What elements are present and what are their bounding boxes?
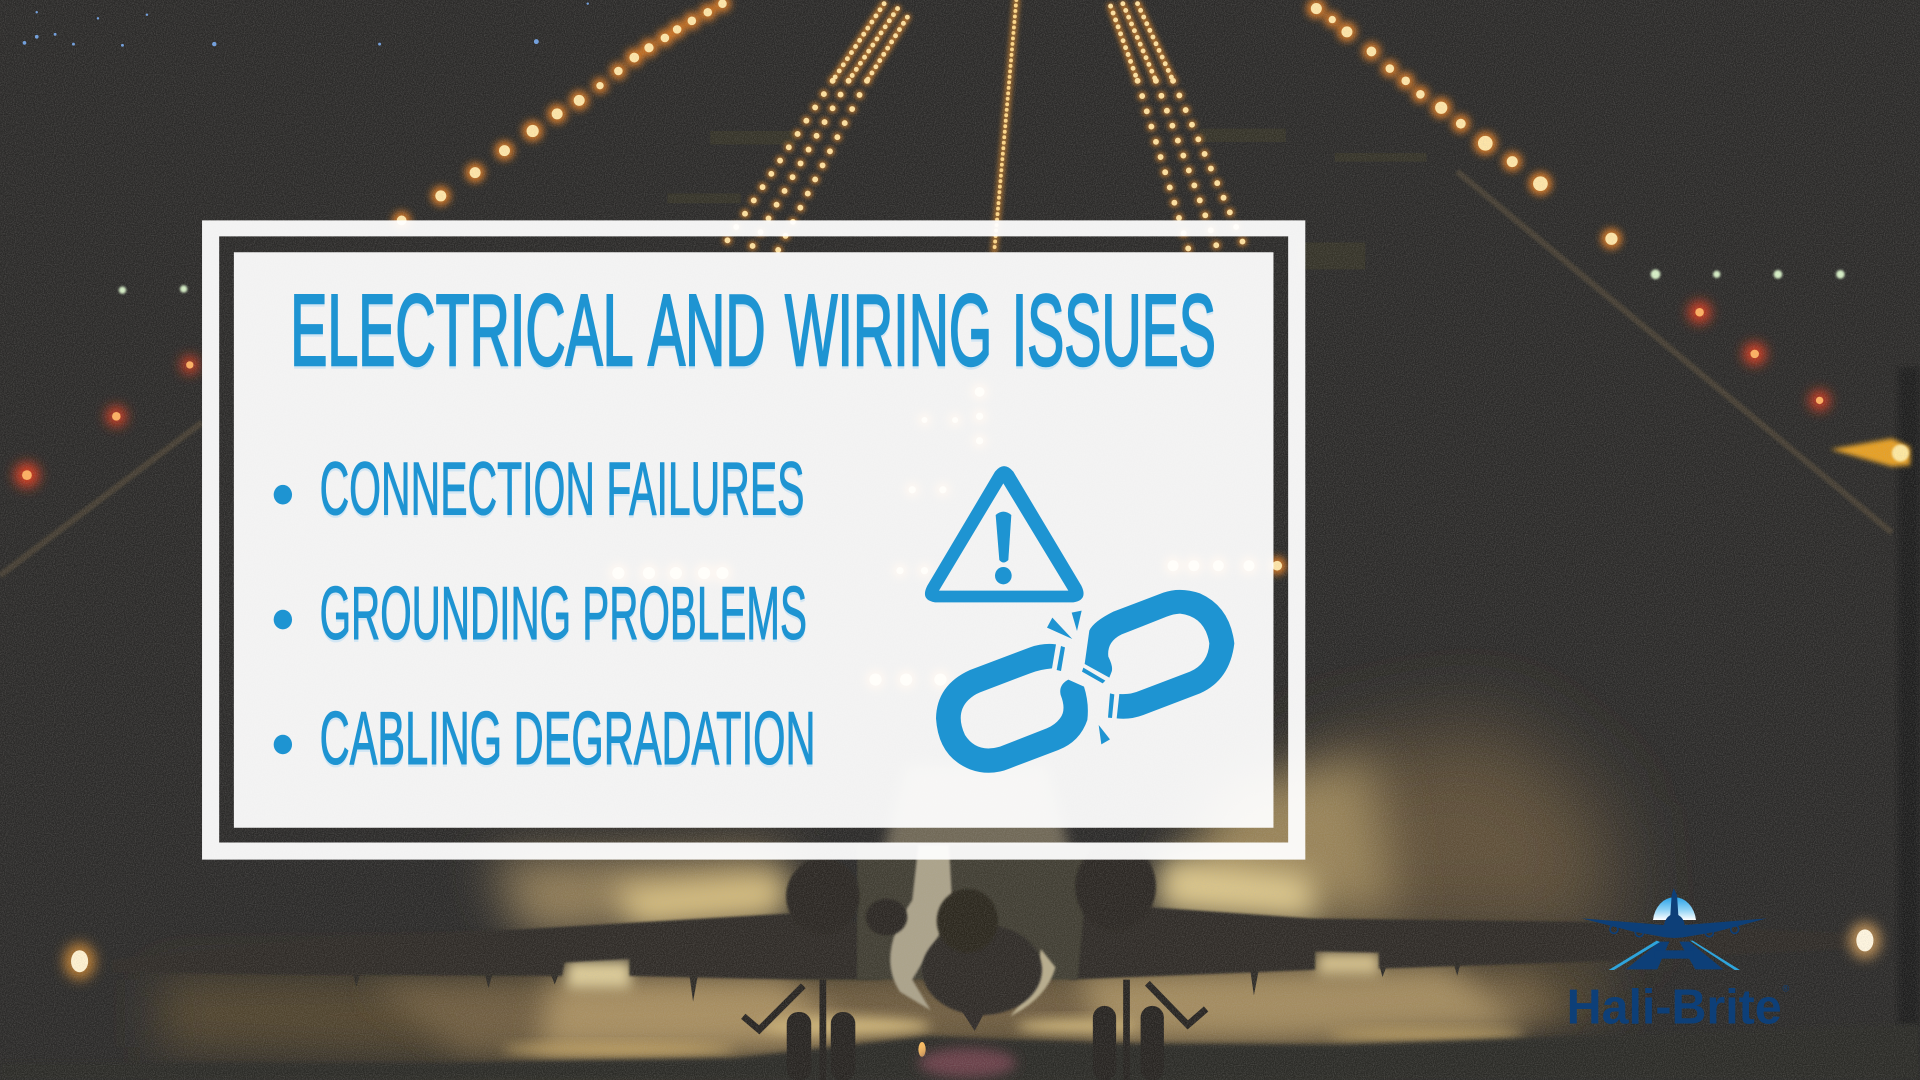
landing gear	[743, 980, 1206, 1080]
right wing	[1053, 907, 1849, 980]
faint runway markings	[667, 129, 1427, 269]
right engine	[1075, 842, 1156, 931]
bullet list	[274, 446, 816, 780]
registered mark: ®	[1782, 984, 1789, 994]
bullet item 3	[274, 696, 816, 780]
outer white frame band	[202, 220, 1305, 860]
logo wordmark: Hali-Brite	[1567, 979, 1782, 1034]
logo sun dome	[1653, 897, 1696, 920]
ground shadow	[0, 1024, 1920, 1080]
aircraft silhouette	[111, 765, 1849, 1080]
left engine	[786, 858, 860, 934]
bullet item 3: CABLING DEGRADATION	[320, 696, 816, 780]
info panel	[202, 220, 1305, 860]
icon: warning triangle and broken chain	[925, 466, 1234, 773]
distant blue city lights	[23, 2, 589, 47]
bullet item 1: CONNECTION FAILURES	[320, 446, 804, 530]
fuselage	[857, 845, 1090, 980]
flap fairings	[353, 962, 1461, 1002]
logo runway	[1609, 941, 1740, 970]
bullet item 2: GROUNDING PROBLEMS	[320, 571, 807, 655]
logo: Hali-Brite	[1567, 888, 1789, 1034]
runway edge lights	[397, 0, 1618, 686]
nose	[922, 924, 1042, 1015]
coloured threshold lights	[15, 269, 1910, 1078]
runway edge stripes	[0, 171, 1892, 576]
icon: warning triangle	[925, 466, 1084, 602]
logo aircraft	[1582, 888, 1767, 938]
bullet item 1	[274, 446, 804, 530]
bullet item 2	[274, 571, 807, 655]
fuselage ghost behind the card	[882, 765, 1071, 857]
icon: broken chain link	[936, 590, 1234, 773]
left wing	[111, 913, 882, 980]
right dark edge	[1898, 367, 1920, 1080]
floodlight glow	[159, 722, 1616, 1058]
approach light rows	[719, 0, 1247, 253]
pale fuselage side	[890, 845, 953, 1010]
inner white card	[234, 252, 1273, 828]
